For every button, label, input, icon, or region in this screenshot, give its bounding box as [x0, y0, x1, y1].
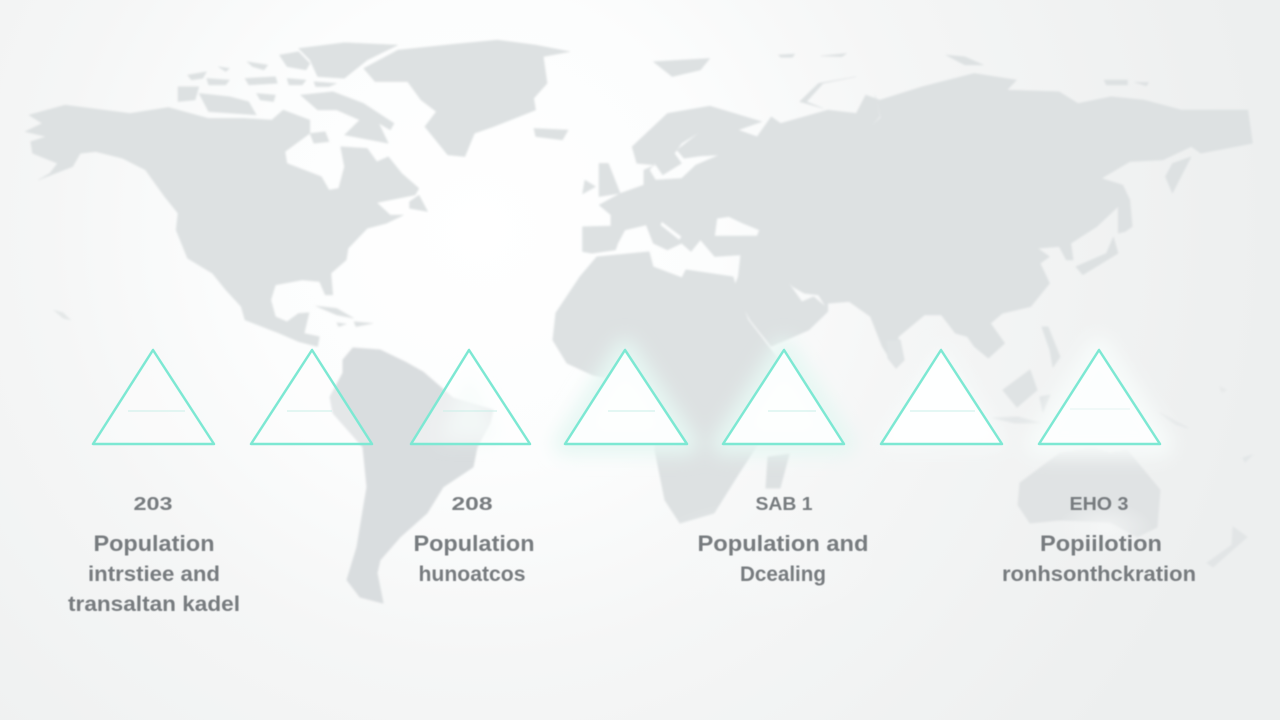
text block 3: [698, 494, 868, 586]
text block 1: transaltan kadel: [68, 593, 240, 616]
text block 3: Population and: [698, 531, 868, 556]
world map: [25, 40, 1253, 603]
text block 2: [414, 494, 534, 586]
triangle 7: [1039, 350, 1160, 444]
text block 1: 203: [134, 494, 172, 514]
text block 1: Population: [94, 531, 214, 556]
text block 2: Population: [414, 531, 534, 556]
triangle 3: [411, 350, 530, 444]
text block 4: EHO 3: [1070, 494, 1128, 514]
text block 3: Dcealing: [740, 563, 826, 586]
glow behind triangles: [440, 350, 1160, 444]
australia: [1018, 448, 1160, 537]
text block 2: 208: [452, 494, 492, 514]
fog over lower map: [640, 500, 1153, 620]
sri lanka: [886, 340, 904, 368]
text block 2: hunoatcos: [418, 563, 526, 586]
triangle 4: [565, 350, 687, 444]
africa: [553, 252, 790, 523]
text block 3: SAB 1: [756, 494, 812, 514]
triangle 5: [723, 350, 844, 444]
triangle row: [93, 350, 1160, 444]
text block 1: intrstiee and: [88, 563, 220, 586]
new zealand: [1207, 527, 1247, 567]
text block 4: ronhsonthckration: [1002, 563, 1196, 586]
south america: [330, 348, 493, 603]
text block 4: [1002, 494, 1196, 586]
triangle 2: [251, 350, 372, 444]
triangle 6: [881, 350, 1002, 444]
eurasia: [582, 53, 1253, 362]
madagascar: [766, 454, 789, 488]
text block 4: Popiilotion: [1040, 531, 1162, 556]
triangle 1: [93, 350, 214, 444]
north america and arctic: [25, 40, 570, 347]
southeast asia islands: [993, 327, 1252, 462]
text block 1: [68, 494, 240, 616]
